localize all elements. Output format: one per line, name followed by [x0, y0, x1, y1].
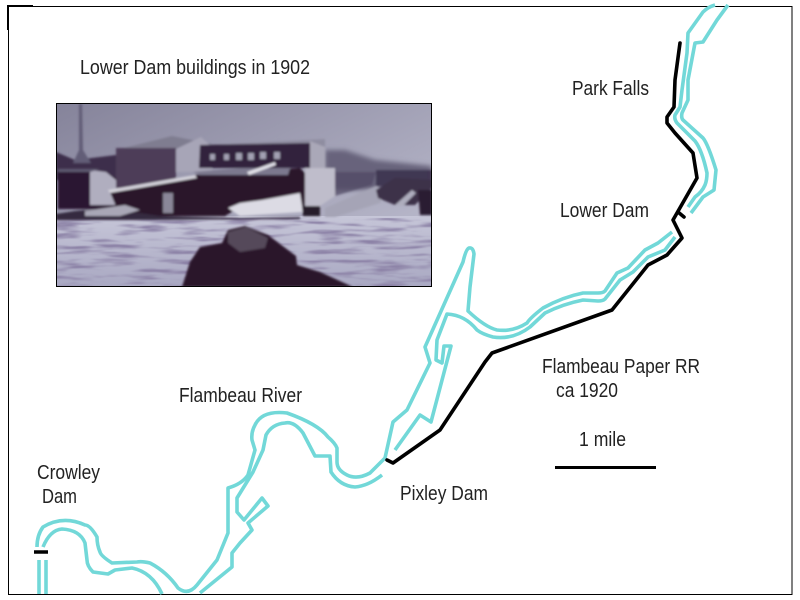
label: Pixley Dam: Pixley Dam: [400, 483, 488, 505]
label: Flambeau Paper RR: Flambeau Paper RR: [542, 356, 700, 378]
heading: photo caption: Lower Dam buildings in 1902: [80, 57, 310, 79]
river: upper section at Park Falls: [675, 5, 728, 213]
river: main channel with Pixley flowage and bends: [37, 232, 675, 594]
label: Flambeau River: Flambeau River: [179, 385, 302, 407]
label: Crowley Dam: Crowley: [37, 462, 100, 484]
label: Crowley Dam: Dam: [42, 486, 77, 508]
railroad: Flambeau Paper RR: [387, 43, 697, 463]
label: Crowley Dam: [37, 462, 100, 508]
photo: Lower Dam buildings in 1902: [56, 103, 432, 287]
scale bar: 1 mile: 1 mile: [579, 429, 626, 451]
label: Park Falls: Park Falls: [572, 78, 649, 100]
icon: Crowley Dam marker: [34, 550, 48, 554]
label: Lower Dam: Lower Dam: [560, 200, 649, 222]
label: ca 1920: ca 1920: [556, 380, 618, 402]
scale bar: 1 mile: [555, 429, 656, 468]
